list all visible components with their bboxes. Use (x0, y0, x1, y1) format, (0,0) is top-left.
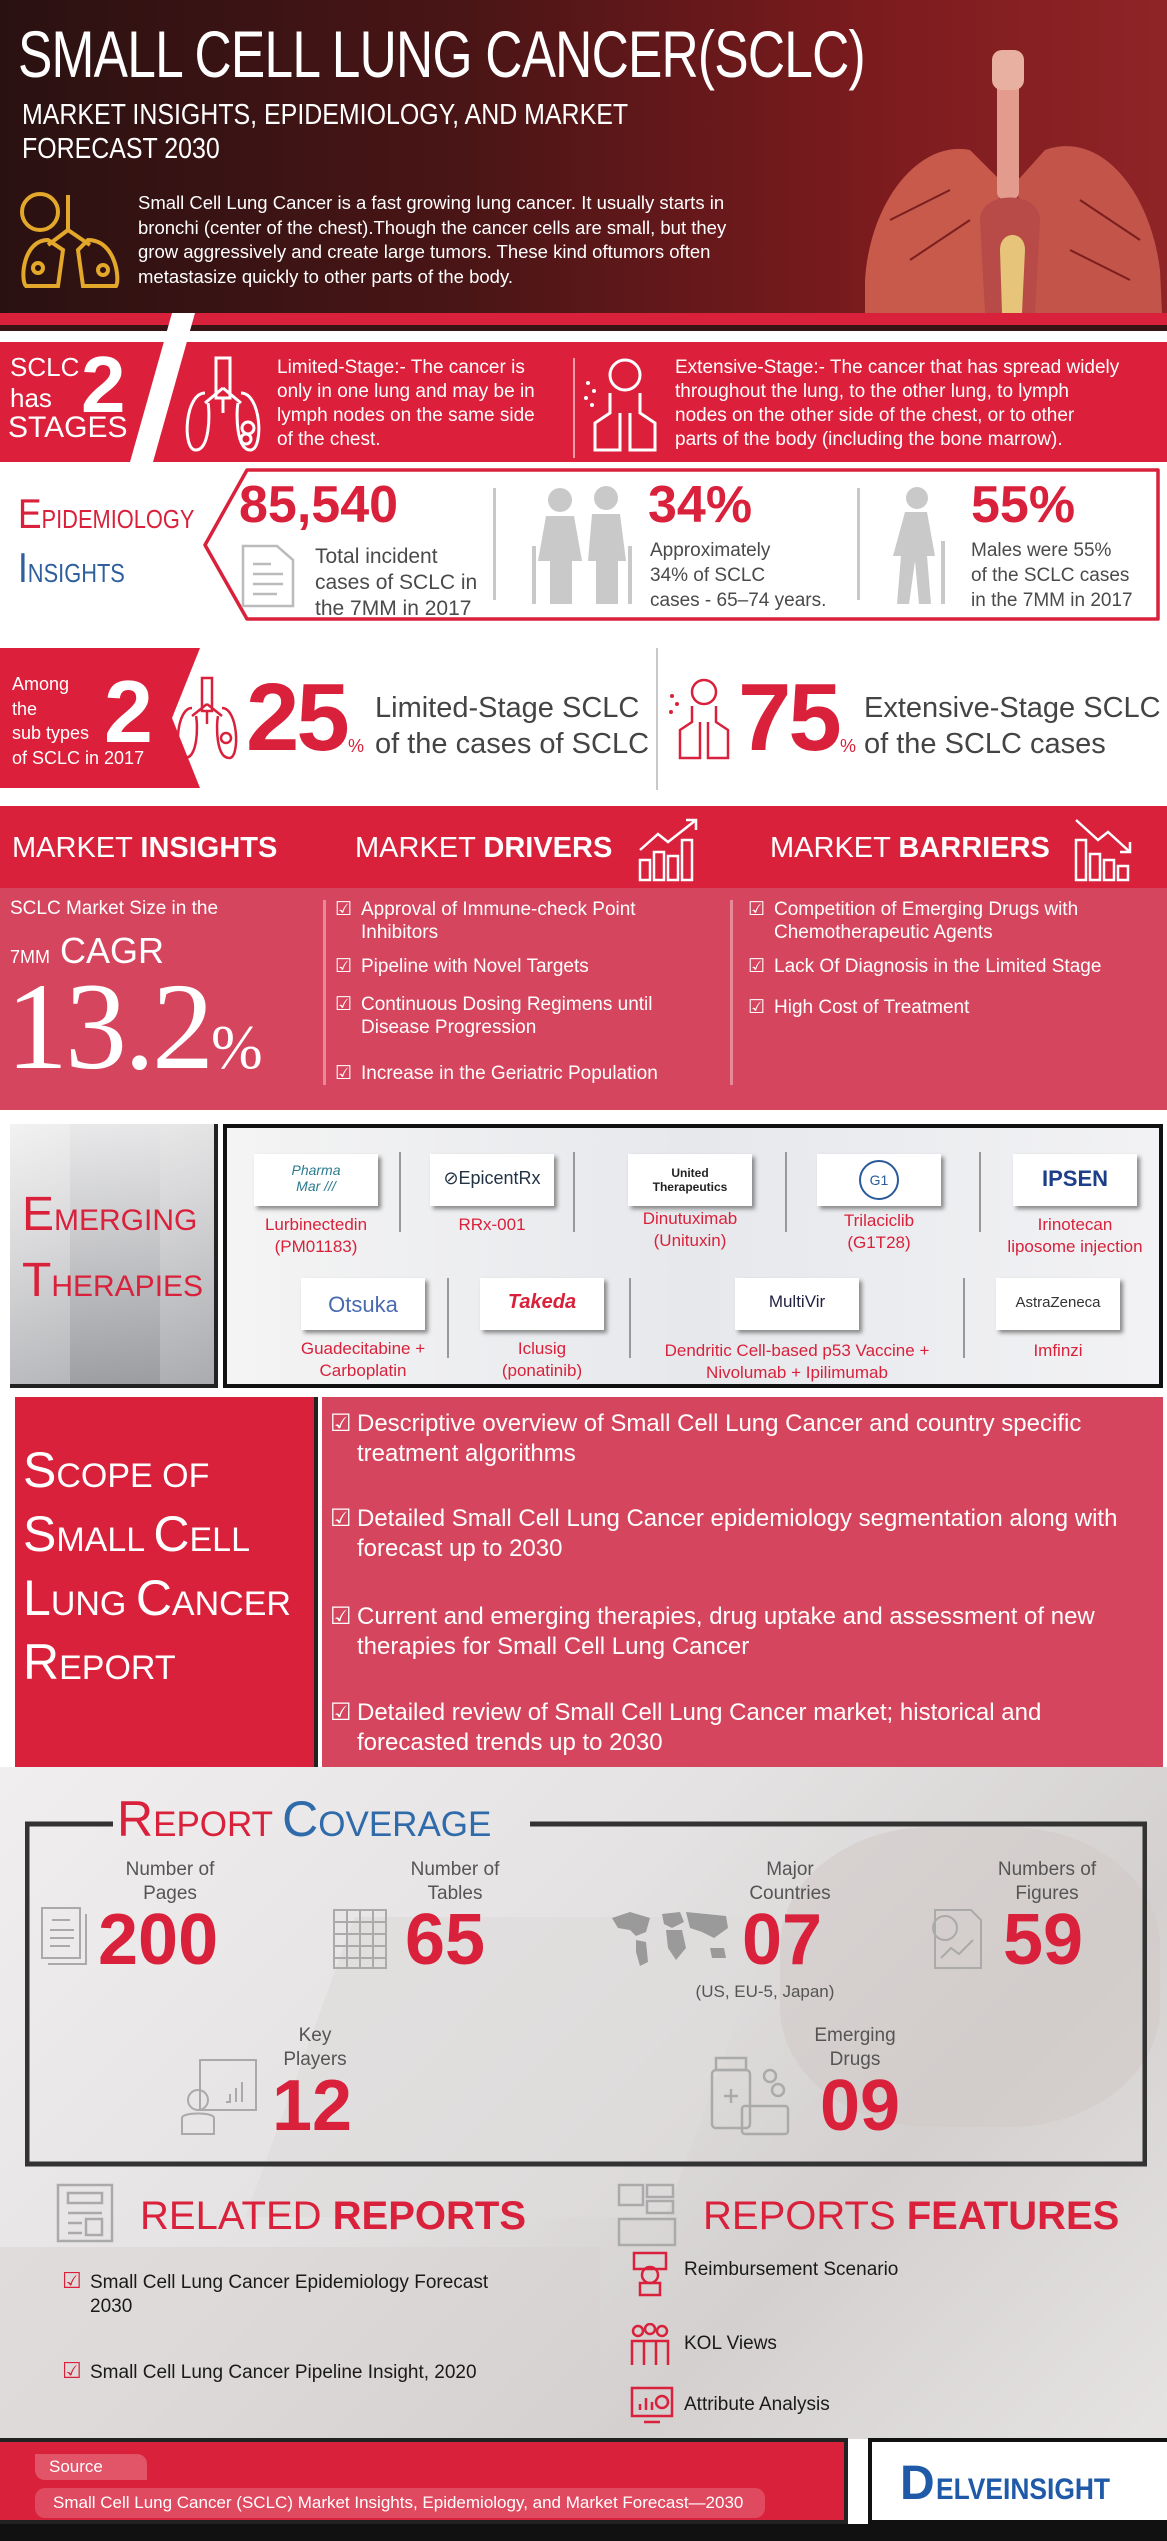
list: drivers: ☑ (335, 994, 352, 1015)
icon: yellow lungs (20, 192, 120, 288)
panel: scope list (322, 1397, 1163, 1767)
stat: figures: 59 (1003, 1900, 1083, 1980)
stat: figures: Figures (1015, 1883, 1079, 1904)
logo: delveinsight: D (900, 2457, 935, 2510)
panel: scope list: ☑ (330, 1505, 352, 1532)
therapy: dinutuximab: Dinutuximab (643, 1209, 737, 1228)
illustration: lungs (865, 50, 1162, 313)
therapy: dinutuximab: (Unituxin) (654, 1231, 726, 1250)
therapy: irinotecan: Irinotecan (1038, 1215, 1112, 1234)
text: limited stage: lymph nodes on the same side (277, 405, 535, 426)
list: drivers (335, 899, 658, 1084)
stat: 34%: Approximately (650, 540, 770, 561)
text: extensive stage: throughout the lung, to the other lung, to lymph (675, 381, 1069, 402)
stat: limited 25% (177, 664, 649, 771)
panel: subtypes (0, 648, 1161, 790)
panel: related reports (50, 2183, 570, 2393)
heading: report coverage: REPORT COVERAGE (117, 1791, 491, 1847)
panel: emerging therapies heading: THERAPIES (22, 1254, 203, 1307)
therapy: iclusig: Takeda (508, 1291, 576, 1313)
text: extensive stage: nodes on the other side of the chest, or to other (675, 405, 1074, 426)
CAGR block: SCLC Market Size in the (10, 898, 218, 919)
panel: scope list: ☑ (330, 1603, 352, 1630)
stages band (0, 313, 1167, 462)
therapy: dendritic vaccine: Nivolumab + Ipilimumab (706, 1363, 888, 1382)
therapy: lurbinectedin: Lurbinectedin (265, 1215, 367, 1234)
list: drivers: Pipeline with Novel Targets (361, 956, 589, 977)
title: SMALL CELL LUNG CANCER(SCLC) (18, 17, 865, 91)
stat: emerging drugs: Emerging (814, 2025, 896, 2046)
panel: report coverage (25, 1791, 1147, 2166)
panel: emerging therapies heading: EMERGING (22, 1188, 197, 1241)
stat: figures: Numbers of (998, 1859, 1096, 1880)
therapy: dendritic vaccine: Dendritic Cell-based p53 Vaccine + (665, 1341, 929, 1360)
stat: countries: 07 (742, 1900, 822, 1980)
panel: market body (0, 888, 1167, 1110)
source tab: Source (49, 2457, 103, 2476)
stat: pages (41, 1859, 218, 1980)
panel: scope list: therapies for Small Cell Lung Cancer (357, 1633, 749, 1660)
header panel (0, 0, 1167, 313)
stat: 85,540: the 7MM in 2017 (315, 597, 471, 620)
stat: emerging drugs: 09 (820, 2066, 900, 2146)
panel: scope list: Detailed Small Cell Lung Cancer epidemiology segmentation along with (357, 1505, 1117, 1532)
list: barriers: High Cost of Treatment (774, 997, 969, 1018)
therapy: guadecitabine (301, 1278, 431, 1380)
stat: 55% (893, 476, 1133, 611)
therapy: lurbinectedin: (PM01183) (275, 1237, 357, 1256)
panel: market header bar (0, 806, 1167, 888)
stat: 34%: 34% of SCLC (650, 565, 765, 586)
therapy: RRx-001 (430, 1154, 560, 1234)
therapy: imfinzi (996, 1278, 1126, 1360)
stat: limited 25%: % (348, 736, 364, 756)
therapy: guadecitabine: Guadecitabine + (301, 1339, 425, 1358)
stat: key players: 12 (272, 2066, 352, 2146)
subtitle: MARKET INSIGHTS, EPIDEMIOLOGY, AND MARKET (22, 99, 628, 131)
stat: tables: 65 (405, 1900, 485, 1980)
therapy: dendritic vaccine (665, 1278, 929, 1382)
list: barriers: ☑ (748, 899, 765, 920)
therapy: iclusig: (ponatinib) (502, 1361, 582, 1380)
stat: tables (333, 1859, 500, 1980)
therapy: iclusig (480, 1278, 610, 1380)
panel: scope heading: SMALL CELL (23, 1506, 250, 1562)
panel: epidemiology stats (203, 468, 1160, 621)
stat: key players: Key (299, 2025, 331, 2046)
stat: 85,540: 85,540 (239, 476, 398, 534)
text: limited stage: Limited-Stage:- The cancer is (277, 357, 525, 378)
therapy: guadecitabine: Otsuka (328, 1292, 398, 1317)
stat: 34% (532, 476, 826, 611)
therapy: lurbinectedin: Pharma (291, 1162, 341, 1178)
stat: 55%: in the 7MM in 2017 (971, 590, 1133, 611)
heading: market barriers: MARKET BARRIERS (770, 832, 1050, 864)
list: drivers: ☑ (335, 899, 352, 920)
panel: scope list: Current and emerging therapies, drug uptake and assessment of new (357, 1603, 1095, 1630)
feature: reimbursement: Reimbursement Scenario (684, 2259, 898, 2280)
text: extensive stage: parts of the body (including the bone marrow). (675, 429, 1063, 450)
subtypes label: of SCLC in 2017 (12, 748, 144, 768)
stat: pages: Pages (143, 1883, 197, 1904)
feature: attribute analysis: Attribute Analysis (684, 2394, 830, 2415)
description text (138, 192, 726, 287)
stat: limited 25%: of the cases of SCLC (375, 728, 649, 760)
source text (35, 2488, 765, 2518)
description text: Small Cell Lung Cancer is a fast growing lung cancer. It usually starts in (138, 192, 724, 213)
therapy: irinotecan: IPSEN (1042, 1166, 1108, 1191)
panel: scope list: ☑ (330, 1410, 352, 1437)
stat: countries: (US, EU-5, Japan) (696, 1982, 834, 2001)
therapy: trilaciclib: Trilaciclib (844, 1211, 914, 1230)
description text: bronchi (center of the chest).Though the cancer cells are small, but they (138, 216, 726, 238)
CAGR block: 13.2% (6, 958, 260, 1095)
panel: reports features (615, 2183, 1115, 2433)
therapy: trilaciclib: (G1T28) (847, 1233, 911, 1252)
panel: emerging therapies heading (10, 1124, 218, 1388)
stat: extensive 75%: % (840, 736, 856, 756)
panel: emerging therapies logos (223, 1124, 1163, 1388)
icon: rising chart (638, 818, 698, 882)
stat: pages: 200 (98, 1900, 218, 1980)
therapy: dendritic vaccine: MultiVir (769, 1292, 825, 1311)
heading: SCLC has 2 stages: SCLC (10, 352, 79, 382)
therapy: imfinzi: Imfinzi (1033, 1341, 1083, 1360)
feature: KOL views: KOL Views (684, 2333, 777, 2354)
stat: limited 25%: 25 (246, 664, 347, 771)
description text: metastasize quickly to other parts of the body. (138, 266, 513, 286)
list: barriers: Chemotherapeutic Agents (774, 922, 993, 943)
list: barriers: Lack Of Diagnosis in the Limited Stage (774, 956, 1101, 977)
therapy: lurbinectedin: Mar /// (296, 1178, 336, 1194)
heading: SCLC has 2 stages: has (10, 383, 52, 413)
list: drivers: Disease Progression (361, 1017, 536, 1038)
stat: countries (610, 1858, 870, 1998)
text: limited stage: only in one lung and may be in (277, 381, 535, 402)
panel: scope heading (15, 1397, 318, 1767)
panel: scope list: forecasted trends up to 2030 (357, 1729, 663, 1756)
description text: grow aggressively and create large tumors. These kind oftumors often (138, 241, 710, 262)
text: extensive stage: Extensive-Stage:- The cancer that has spread widely (675, 357, 1119, 378)
list: drivers: ☑ (335, 956, 352, 977)
icon: lungs limited (186, 356, 260, 452)
feature: reimbursement (630, 2251, 1010, 2297)
subtitle (22, 99, 628, 165)
stat: countries: Countries (749, 1883, 831, 1904)
therapy: trilaciclib (817, 1154, 947, 1252)
stat: 85,540 (239, 476, 477, 620)
heading: epidemiology insights (18, 490, 194, 591)
stat: 34%: cases - 65–74 years. (650, 590, 826, 611)
icon: falling chart (1074, 819, 1132, 882)
stat: 34%: 34% (648, 476, 752, 534)
therapy: dinutuximab (628, 1154, 758, 1250)
feature: attribute analysis (630, 2386, 930, 2432)
stat: tables: Number of (411, 1859, 499, 1880)
heading: SCLC has 2 stages: 2 (81, 340, 126, 429)
stat: extensive 75% (669, 664, 1161, 771)
stat: pages: Number of (126, 1859, 214, 1880)
heading: reports features: REPORTS FEATURES (703, 2194, 1119, 2238)
panel: related reports: Small Cell Lung Cancer Pipeline Insight, 2020 (90, 2362, 477, 2383)
icon: extensive body (584, 358, 656, 452)
panel: scope list: treatment algorithms (357, 1440, 576, 1467)
subtypes label: 2 (104, 662, 153, 761)
therapy: iclusig: Iclusig (518, 1339, 566, 1358)
stat: extensive 75%: of the SCLC cases (864, 728, 1106, 760)
feature: KOL views (630, 2323, 930, 2369)
subtypes label: Among (12, 674, 69, 694)
logo: delveinsight: ELVEINSIGHT (936, 2473, 1110, 2506)
panel: scope list: Detailed review of Small Cell Lung Cancer market; historical and (357, 1699, 1041, 1726)
stat: emerging drugs: Drugs (830, 2049, 880, 2070)
panel: scope list: ☑ (330, 1699, 352, 1726)
list: barriers: Competition of Emerging Drugs with (774, 899, 1078, 920)
list: related reports (61, 2268, 63, 2270)
stat: 85,540: Total incident (315, 545, 438, 568)
panel: scope list: forecast up to 2030 (357, 1535, 562, 1562)
panel: related reports: 2030 (90, 2296, 132, 2317)
text: limited stage: of the chest. (277, 429, 381, 450)
therapy: dinutuximab: United (671, 1166, 709, 1180)
stat: tables: Tables (428, 1883, 482, 1904)
heading: market insights: MARKET INSIGHTS (12, 832, 277, 864)
stat: extensive 75%: 75 (738, 664, 839, 771)
list: drivers: Inhibitors (361, 922, 438, 943)
therapy: irinotecan (1007, 1154, 1143, 1256)
logo: delveinsight (868, 2438, 1167, 2524)
panel: related reports: Small Cell Lung Cancer Epidemiology Forecast (90, 2272, 488, 2293)
therapy: lurbinectedin (254, 1154, 384, 1256)
heading: SCLC has 2 stages (8, 340, 127, 444)
panel: scope list: Descriptive overview of Small Cell Lung Cancer and country specific (357, 1410, 1081, 1437)
subtitle: FORECAST 2030 (22, 133, 220, 165)
stat: key players (180, 2024, 380, 2139)
stat: 55%: of the SCLC cases (971, 565, 1129, 586)
text: extensive stage (675, 357, 1120, 450)
CAGR block (6, 898, 261, 1095)
stat: 55%: Males were 55% (971, 540, 1111, 561)
stat: emerging drugs (710, 2024, 910, 2139)
subtypes label: sub types (12, 723, 89, 743)
panel: related reports: ☑ (62, 2268, 82, 2293)
stat: countries: Major (766, 1859, 814, 1880)
heading: related reports: RELATED REPORTS (140, 2194, 526, 2238)
subtypes label: the (12, 698, 37, 718)
icon: features box (617, 2183, 679, 2247)
stat: key players: Players (283, 2049, 347, 2070)
list: drivers: ☑ (335, 1063, 352, 1084)
therapy: imfinzi: AstraZeneca (1015, 1294, 1101, 1311)
list: drivers: Continuous Dosing Regimens until (361, 994, 652, 1015)
stat: extensive 75%: Extensive-Stage SCLC (864, 692, 1161, 724)
therapy: RRx-001: RRx-001 (458, 1215, 526, 1234)
list: drivers: Approval of Immune-check Point (361, 899, 636, 920)
list: barriers: ☑ (748, 956, 765, 977)
therapy: trilaciclib: G1 (870, 1172, 888, 1188)
footer: source (0, 2438, 848, 2524)
subtypes label (0, 648, 200, 788)
text: limited stage (277, 357, 535, 450)
source text: Small Cell Lung Cancer (SCLC) Market Insights, Epidemiology, and Market Forecast—2030 (53, 2493, 743, 2512)
therapy: irinotecan: liposome injection (1007, 1237, 1143, 1256)
list: drivers: Increase in the Geriatric Population (361, 1063, 658, 1084)
heading: epidemiology insights: EPIDEMIOLOGY (18, 490, 194, 537)
CAGR block: 7MM CAGR (10, 930, 164, 971)
stat: 85,540: cases of SCLC in (315, 571, 477, 594)
therapy: dinutuximab: Therapeutics (653, 1180, 727, 1194)
icon: report document (52, 2183, 114, 2243)
panel: related reports: ☑ (62, 2358, 82, 2383)
source tab (35, 2454, 147, 2480)
heading: market drivers: MARKET DRIVERS (355, 832, 612, 864)
panel: scope heading: REPORT (23, 1634, 176, 1690)
list: barriers: ☑ (748, 997, 765, 1018)
heading: epidemiology insights: INSIGHTS (18, 544, 125, 591)
therapy: guadecitabine: Carboplatin (320, 1361, 406, 1380)
panel: scope heading: SCOPE OF (23, 1442, 209, 1498)
therapy: RRx-001: ⊘EpicentRx (443, 1168, 541, 1188)
stat: figures (925, 1858, 1125, 1973)
heading: SCLC has 2 stages: STAGES (8, 411, 127, 444)
stat: 55%: 55% (971, 476, 1075, 534)
panel: scope heading: LUNG CANCER (23, 1570, 291, 1626)
background photo area (0, 1767, 1167, 2439)
list: barriers (748, 899, 1101, 1018)
stat: limited 25%: Limited-Stage SCLC (375, 692, 639, 724)
